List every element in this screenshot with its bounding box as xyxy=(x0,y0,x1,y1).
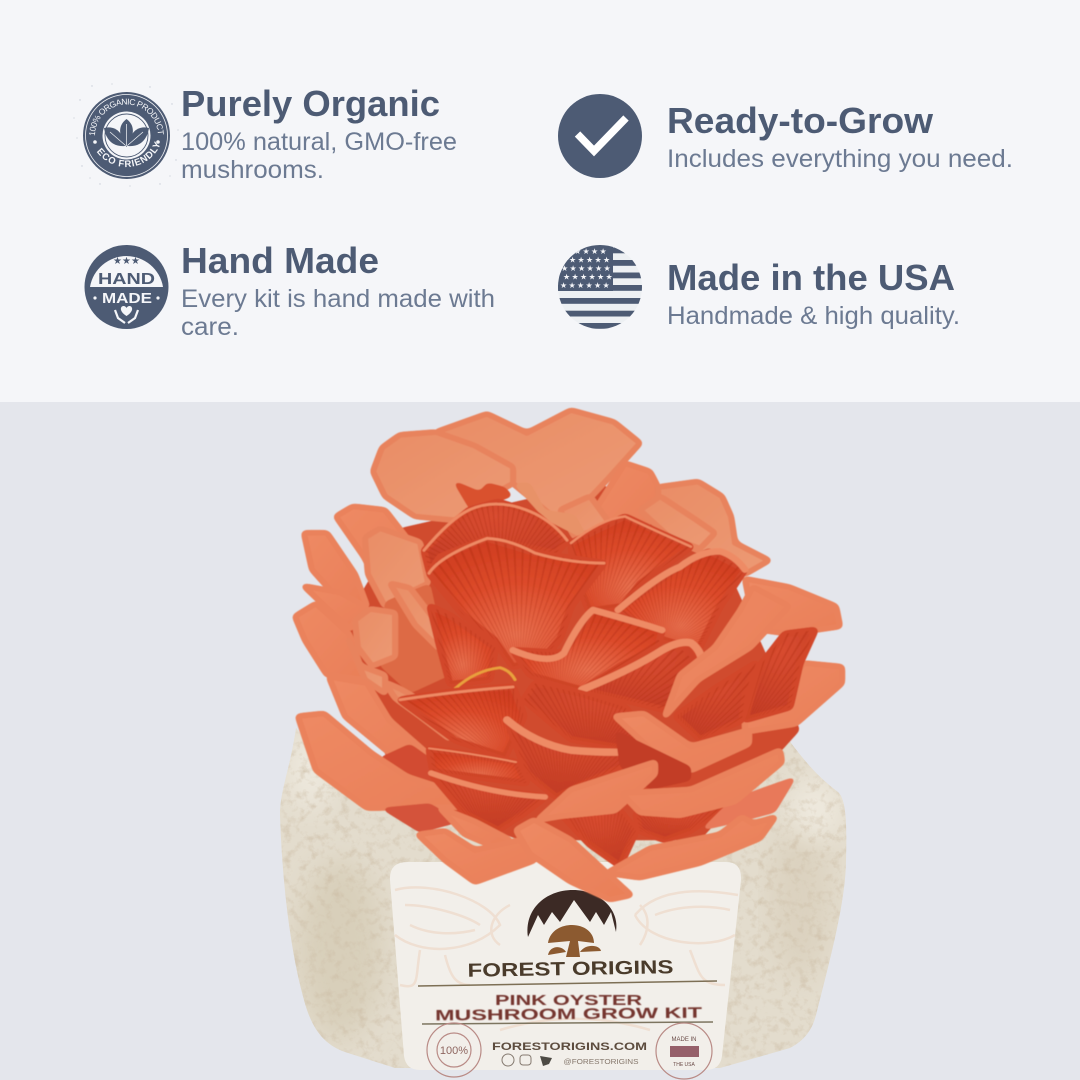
text: organic description xyxy=(181,128,457,184)
icon: USA flag circle: ★★★★ xyxy=(574,247,607,256)
text: organic description: mushrooms. xyxy=(181,156,324,184)
icon: hand made badge: ★★★ xyxy=(113,256,140,267)
front caps xyxy=(418,750,782,900)
feature: Purely Organic xyxy=(74,83,457,186)
label 100% badge: 100% xyxy=(440,1045,468,1057)
top panel background xyxy=(0,0,1080,402)
lower caps xyxy=(298,677,749,808)
label brand name: FOREST ORIGINS xyxy=(467,957,674,982)
text: hand made description xyxy=(181,285,495,341)
label product name: PINK OYSTER xyxy=(495,992,642,1009)
gills: lower row xyxy=(385,716,794,866)
label 100% badge xyxy=(427,1023,481,1077)
top left cap xyxy=(373,432,513,520)
icon: USA flag circle: ★★★★★ xyxy=(569,256,610,264)
text: hand made description: Every kit is hand made with xyxy=(181,285,495,313)
text: hand made description: care. xyxy=(181,313,239,341)
label made in USA badge xyxy=(656,1023,712,1079)
icon: hand made badge xyxy=(84,245,168,329)
text: organic description: 100% natural, GMO-free xyxy=(181,128,457,156)
bottom panel background xyxy=(0,402,1080,1080)
text: ready-to-grow description: Includes everything you need. xyxy=(667,145,1013,173)
icon: organic eco-friendly seal: ECO FRIENDLY xyxy=(96,141,160,168)
feature: Made in the USA xyxy=(558,245,960,330)
label product name xyxy=(435,992,702,1024)
heading: Ready-to-Grow: Ready-to-Grow xyxy=(667,100,934,141)
text: USA description: Handmade & high quality. xyxy=(667,302,960,330)
icon: organic eco-friendly seal xyxy=(74,84,178,186)
pink oyster mushroom cluster xyxy=(295,410,842,950)
gills: middle row xyxy=(397,595,818,756)
heading: Purely Organic: Purely Organic xyxy=(181,83,440,124)
label made in USA badge: THE USA xyxy=(673,1062,695,1068)
heading: Made in the USA: Made in the USA xyxy=(667,257,955,298)
label made in USA badge: MADE IN xyxy=(671,1037,697,1043)
product label xyxy=(390,862,741,1079)
back caps xyxy=(295,410,842,732)
feature: Ready-to-Grow xyxy=(558,94,1013,178)
label social handle: @FORESTORIGINS xyxy=(564,1059,639,1066)
logo: forest dome and mushroom xyxy=(528,890,617,957)
icon: USA flag circle: ★★★★★★ xyxy=(561,264,611,273)
heading: Hand Made: Hand Made xyxy=(181,240,379,281)
icon: hand made badge: HAND xyxy=(98,271,155,288)
mushroom shadow core xyxy=(340,483,800,840)
icon: check mark badge xyxy=(558,94,642,178)
gills: upper row xyxy=(385,502,745,753)
icon: organic eco-friendly seal: 100% ORGANIC PRODUCT xyxy=(89,98,164,136)
label website: FORESTORIGINS.COM xyxy=(492,1041,647,1053)
grow bag xyxy=(270,720,860,1080)
icon: hand made badge: MADE xyxy=(102,290,152,307)
icon: USA flag circle: ★★★★★★ xyxy=(563,272,613,282)
feature: Hand Made xyxy=(84,240,495,341)
product photo: grow kit xyxy=(270,410,860,1080)
icon: USA flag circle: ★★★★★★ xyxy=(560,281,610,290)
label product name: MUSHROOM GROW KIT xyxy=(435,1005,702,1024)
icon: USA flag circle xyxy=(558,245,642,329)
